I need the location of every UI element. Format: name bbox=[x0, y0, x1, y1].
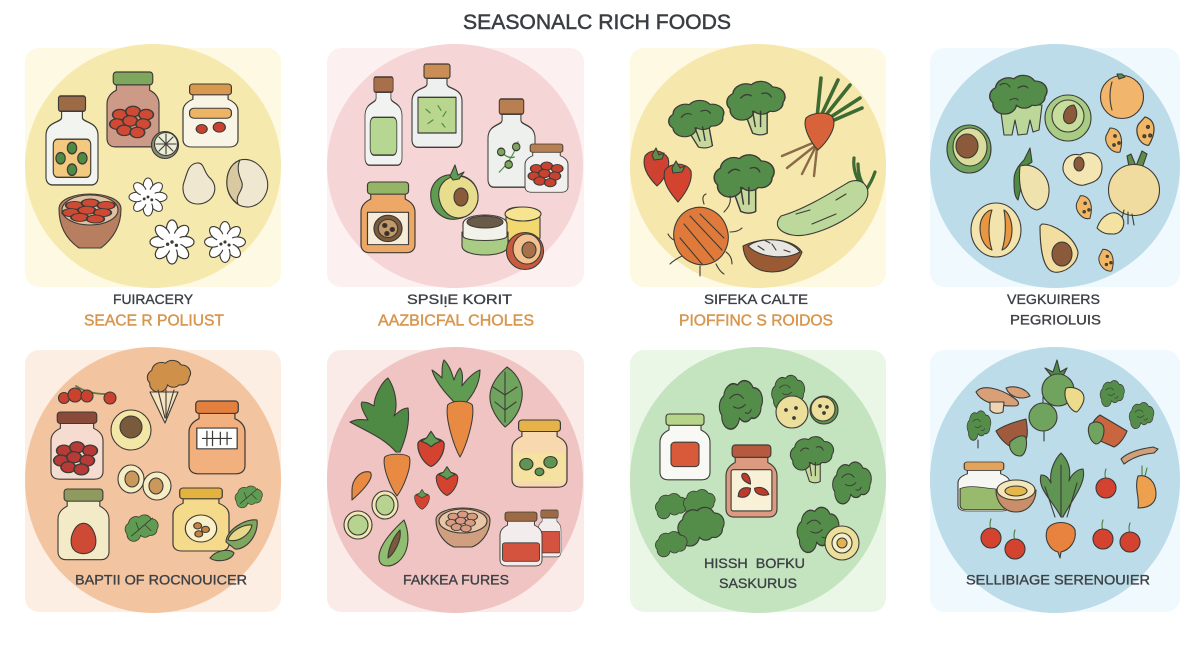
icon: potatoes bbox=[183, 159, 268, 207]
icon: orange wedge bbox=[1137, 466, 1156, 508]
label: heading 1: FUIRACERY bbox=[113, 291, 194, 307]
icon: big bottle with green label bbox=[412, 64, 462, 147]
panel card 4 bbox=[930, 48, 1180, 287]
icon: pear half bbox=[1014, 148, 1049, 210]
label: heading 6: FAKKEA FURES bbox=[403, 572, 509, 588]
panel card 6 bbox=[327, 350, 584, 612]
icon: broccoli bunch bbox=[990, 75, 1047, 135]
icon: bowl with yolk bbox=[996, 480, 1036, 512]
icon: cut avocado bbox=[431, 165, 478, 219]
icon: left avocado bbox=[947, 125, 991, 173]
icon: carrot with large leaves bbox=[350, 378, 410, 496]
circle backdrop 3 bbox=[630, 44, 886, 288]
icon: small carrot bbox=[352, 472, 371, 500]
panel: top blue produce bbox=[930, 44, 1180, 328]
panel card 8 bbox=[930, 350, 1180, 612]
icon: peach half bbox=[506, 232, 544, 270]
label: heading 2: SPSIᴉE KORIT bbox=[407, 291, 513, 307]
icon: jar of red berries bbox=[51, 412, 103, 479]
label: heading 4: VEGKUIRERS bbox=[1007, 291, 1100, 307]
circle backdrop 8 bbox=[930, 347, 1180, 613]
icon: striped orange with tendrils bbox=[666, 194, 742, 276]
label: heading 7 line 2: SASKURUS bbox=[719, 575, 797, 591]
icon: pale nut bbox=[1097, 213, 1124, 234]
label: heading 7 line 1: HISSH BOFKU bbox=[704, 555, 805, 571]
panel card 3 bbox=[630, 48, 886, 287]
panel card 1 bbox=[25, 48, 281, 287]
icon: jar with strawberry label bbox=[58, 489, 109, 560]
icon: parsley bunch bbox=[655, 490, 724, 557]
icon: avocado halves bbox=[111, 410, 151, 450]
icon: brown wedges with greens bbox=[996, 415, 1127, 456]
panel: bottom green bbox=[630, 347, 886, 613]
circle backdrop 1 bbox=[25, 44, 281, 288]
icon: cut lime and leaf bbox=[210, 520, 257, 561]
icon: jar of green sauce bbox=[958, 462, 1010, 511]
label: heading 3: SIFEKA CALTE bbox=[704, 291, 808, 307]
circle backdrop 6 bbox=[327, 347, 583, 613]
panel: top pink bottles bbox=[327, 44, 584, 330]
circle backdrop 5 bbox=[25, 347, 281, 613]
icon: zucchini bbox=[777, 158, 875, 236]
icon: bowl of beans bbox=[436, 508, 490, 547]
icon: white peach bbox=[1063, 153, 1102, 185]
icon: pieces with seeds bbox=[1076, 116, 1157, 271]
icon: green turnips bbox=[1029, 360, 1084, 441]
circle backdrop 4 bbox=[930, 44, 1180, 288]
icon: red tomatoes bbox=[981, 469, 1140, 559]
icon: orange jar bbox=[361, 182, 415, 253]
panel: top yellow vegetables bbox=[630, 44, 886, 330]
icon: yellow cream jar bbox=[505, 207, 541, 243]
label: heading 5: BAPTII OF ROCNOUICER bbox=[75, 572, 247, 588]
icon: green leaf head bbox=[490, 367, 522, 427]
label: subheading 3: PIOFFINC S ROIDOS bbox=[679, 312, 833, 330]
panel card 2 bbox=[327, 48, 584, 287]
icon: red sauce jars bbox=[500, 510, 561, 566]
icon: jar of red fruit bbox=[107, 72, 159, 147]
icon: bowl of red beans bbox=[59, 194, 121, 248]
icon: bottle with herb label bbox=[46, 96, 98, 185]
icon: radishes bbox=[644, 148, 691, 202]
panel card 5 bbox=[25, 350, 281, 612]
icon: rice bowl bbox=[743, 240, 802, 272]
icon: leafy cabbages bbox=[719, 375, 871, 552]
icon: green rings bbox=[344, 491, 398, 539]
icon: bottom avocado bbox=[1040, 224, 1078, 272]
icon: brown jar with flower label bbox=[726, 445, 777, 517]
icon: bean pod bbox=[379, 520, 408, 566]
icon: turnip bbox=[1108, 151, 1160, 225]
icon: broccoli group bbox=[665, 81, 785, 213]
icon: brown broccoli bbox=[147, 360, 190, 423]
icon: broccoli bbox=[790, 437, 833, 483]
icon: cherries bbox=[58, 386, 116, 404]
icon: beet with leaves bbox=[1040, 453, 1084, 558]
label: subheading 4: PEGRIOLUIS bbox=[1010, 312, 1101, 328]
icon: white jar with red label bbox=[660, 414, 710, 480]
title: SEASONALC RICH FOODS bbox=[463, 11, 731, 34]
label: subheading 1: SEACE R POLIUST bbox=[84, 312, 224, 330]
icon: mushrooms bbox=[976, 387, 1030, 413]
icon: parsley leaves bbox=[125, 486, 262, 541]
icon: bottle with vine bbox=[488, 99, 535, 187]
icon: beet with greens bbox=[782, 78, 862, 176]
icon: orange labelled jar bbox=[189, 401, 245, 474]
label: heading 8: SELLIBIAGE SERENOUIER bbox=[966, 572, 1150, 588]
circle backdrop 2 bbox=[327, 44, 583, 288]
icon: melon slice bbox=[825, 526, 859, 560]
icon: small bottle of green liquid bbox=[365, 77, 402, 165]
icon: green apple half bbox=[1045, 95, 1091, 141]
icon: orange fruit bbox=[1100, 74, 1144, 118]
icon: white flowers bbox=[129, 178, 245, 264]
icon: strawberries bbox=[415, 431, 458, 509]
panel card 7 bbox=[630, 350, 886, 612]
icon: halved eggs bbox=[118, 465, 171, 500]
circle backdrop 7 bbox=[630, 347, 886, 613]
panel: bottom blue vegetables bbox=[930, 347, 1180, 613]
icon: cut melon bbox=[971, 203, 1021, 257]
icon: small jar of red fruit bbox=[525, 144, 568, 192]
icon: jar with orange band bbox=[183, 84, 238, 147]
panel: top left yellow jars bbox=[25, 44, 281, 330]
icon: herb jar bbox=[512, 420, 567, 487]
icon: twig root bbox=[1121, 447, 1158, 464]
icon: zucchini slices bbox=[776, 396, 838, 428]
icon: large carrot bbox=[432, 360, 480, 457]
icon: small greens bbox=[967, 381, 1154, 448]
panel: bottom pink carrots bbox=[327, 347, 584, 613]
icon: lime slice bbox=[152, 132, 178, 158]
icon: green cream jar bbox=[462, 215, 508, 255]
label: subheading 2: AAZBICFAL CHOLES bbox=[378, 312, 534, 330]
icon: yellow jar of nuts bbox=[173, 488, 229, 551]
panel: bottom peach jars bbox=[25, 347, 281, 613]
